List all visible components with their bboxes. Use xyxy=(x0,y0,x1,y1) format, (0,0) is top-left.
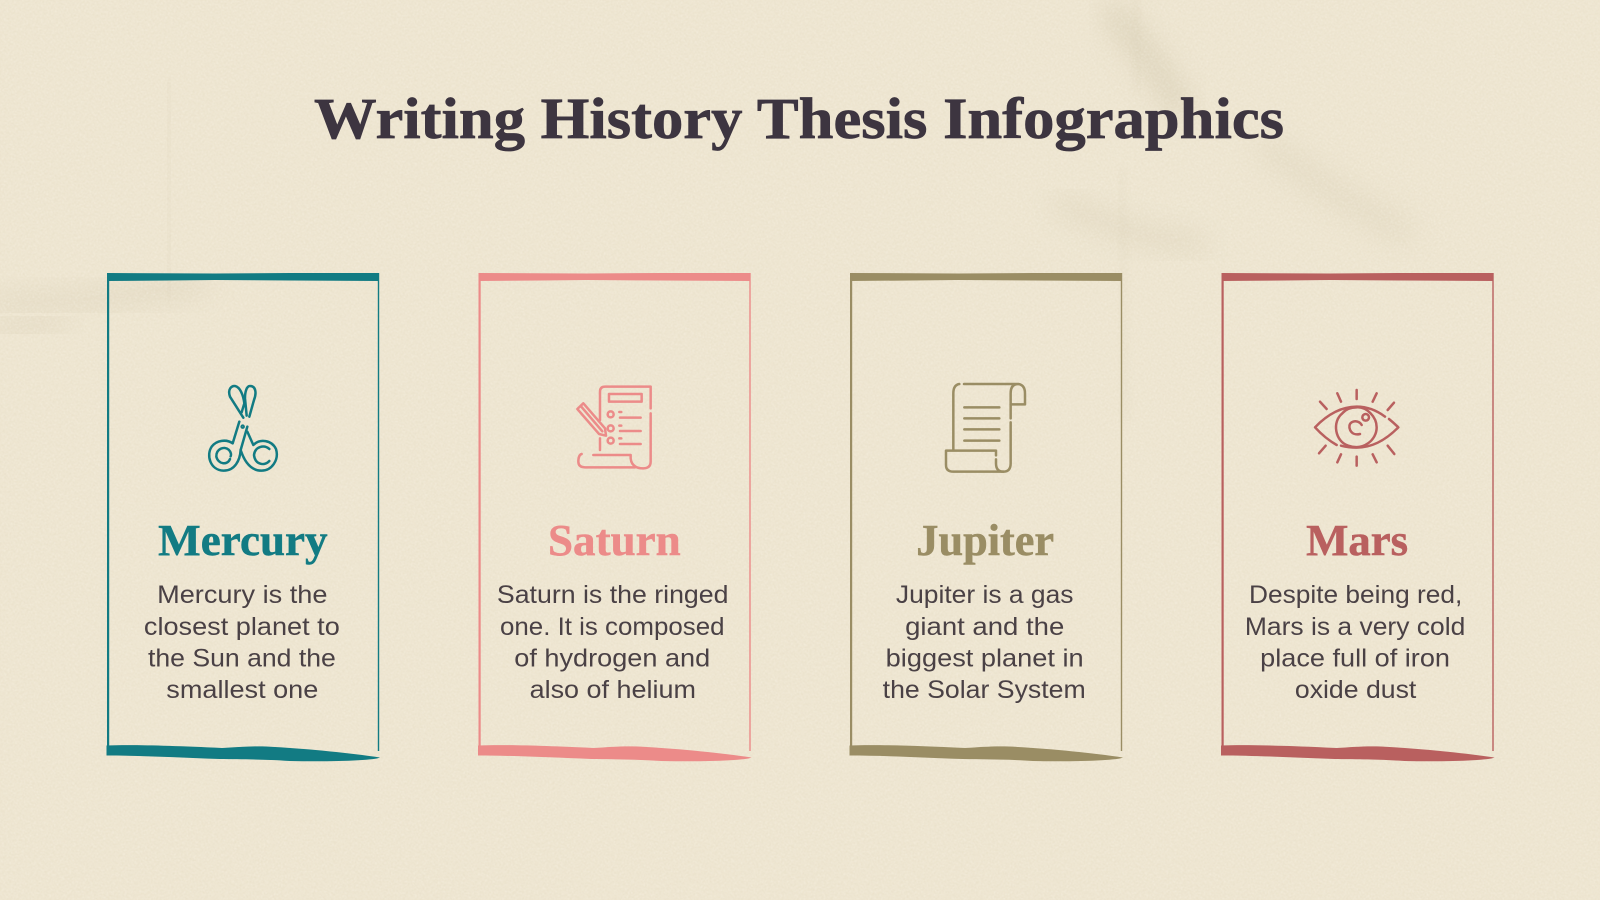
panel: Saturn xyxy=(478,273,752,761)
text: Mercury description: smallest one xyxy=(166,676,318,704)
text: Jupiter description xyxy=(883,581,1086,704)
text: Mars description: Mars is a very cold xyxy=(1245,613,1465,641)
panel: Mercury xyxy=(106,273,380,761)
text: Jupiter description: biggest planet in xyxy=(886,644,1084,672)
panel: Jupiter xyxy=(850,273,1123,761)
icon: checklist with pencil xyxy=(577,387,651,468)
icon: scissors xyxy=(209,386,277,471)
icon: eye xyxy=(1315,390,1398,466)
text: Saturn description: of hydrogen and xyxy=(514,644,710,672)
text: Jupiter description: giant and the xyxy=(905,613,1064,641)
text: Jupiter description: the Solar System xyxy=(883,676,1086,704)
text: Mars description: place full of iron xyxy=(1260,644,1450,672)
text: Mars description: Despite being red, xyxy=(1249,581,1462,609)
heading: Mercury: Mercury xyxy=(158,516,328,565)
title: Writing History Thesis Infographics xyxy=(314,86,1284,151)
heading: Saturn: Saturn xyxy=(548,516,681,565)
frame: Mars xyxy=(1221,273,1494,761)
frame: Saturn xyxy=(478,273,752,761)
text: Mercury description: the Sun and the xyxy=(148,644,336,672)
frame: Jupiter xyxy=(850,273,1123,761)
heading: Jupiter: Jupiter xyxy=(916,516,1054,565)
text: Mercury description: Mercury is the xyxy=(157,581,328,609)
text: Jupiter description: Jupiter is a gas xyxy=(896,581,1074,609)
heading: Mars: Mars xyxy=(1306,516,1408,565)
icon: scroll xyxy=(946,384,1025,472)
text: Saturn description xyxy=(497,581,728,704)
panel: Mars xyxy=(1221,273,1494,761)
text: Saturn description: Saturn is the ringed xyxy=(497,581,728,609)
text: Saturn description: also of helium xyxy=(530,676,696,704)
text: Mercury description xyxy=(144,581,340,704)
text: Mars description xyxy=(1245,581,1465,704)
text: Mars description: oxide dust xyxy=(1295,676,1416,704)
text: Mercury description: closest planet to xyxy=(144,613,340,641)
frame: Mercury xyxy=(106,273,380,761)
text: Saturn description: one. It is composed xyxy=(500,613,724,641)
